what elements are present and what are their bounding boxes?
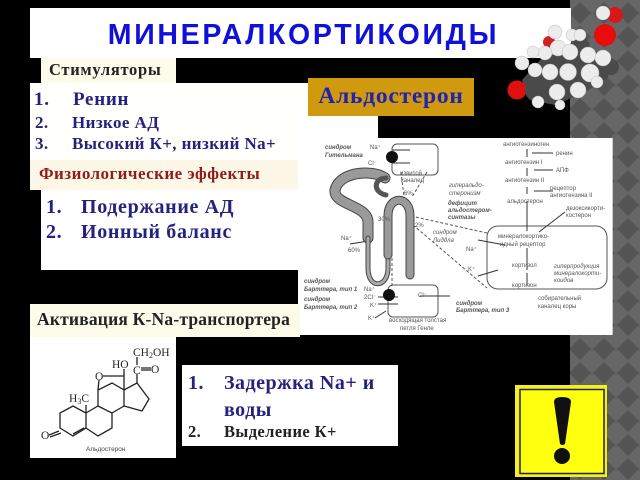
diagram: nephron and aldosterone regulation: АПФ [556,168,569,174]
result 1: 1. [188,372,204,394]
diagram: nephron and aldosterone regulation: собирательный [538,295,581,302]
diagram: nephron and aldosterone regulation: Na⁺ [466,246,477,253]
nephron tubule [335,173,410,284]
diagram: nephron and aldosterone regulation: Na⁺ [341,235,352,242]
item 3: 3. [35,134,49,153]
diagram: nephron and aldosterone regulation: каналец коры [538,304,576,310]
diagram: nephron and aldosterone regulation: синдром [325,145,352,151]
diagram: nephron and aldosterone regulation: коидов [554,278,573,284]
diagram: nephron and aldosterone regulation: Cl⁻ [368,161,377,167]
chart: aldosterone structural formula: 2 [149,351,153,360]
diagram: nephron and aldosterone regulation: извитой [400,170,422,177]
panel: stimulators list [30,83,310,161]
diagram: nephron and aldosterone regulation: синдром [304,297,331,303]
chart: aldosterone structural formula: H [69,393,77,405]
title [30,8,571,58]
heading: aldosterone [308,78,474,116]
panel: K-Na transporter activation heading: Активация К-Na-транспортера [37,309,290,329]
panel: effects of transporter activation [182,365,398,446]
diagram: nephron and aldosterone regulation: Na⁺ [370,144,381,151]
panel: effects list [41,190,299,270]
diagram: nephron and aldosterone regulation: Cl⁻ [418,293,427,299]
panel: physiological effects heading [30,160,300,190]
result 2: Выделение К+ [224,422,337,441]
chart: aldosterone structural formula: 3 [77,397,81,406]
diagram: nephron and aldosterone regulation: K⁺ [370,302,377,309]
effect 2: Ионный баланс [81,221,232,243]
diagram: nephron and aldosterone regulation: альдостерон [507,199,543,205]
panel: stimulators heading: Стимуляторы [49,60,161,79]
effect 2: 2. [46,221,62,243]
diagram: nephron and aldosterone regulation: 2Cl⁻ [364,295,376,301]
panel: K-Na transporter activation heading [30,304,300,337]
diagram: nephron and aldosterone regulation: синтазы [448,215,476,221]
diagram: nephron and aldosterone regulation: кортизол [512,263,537,269]
diagram: nephron and aldosterone regulation: 6% [404,191,413,197]
diagram: nephron and aldosterone regulation: дефицит [448,200,478,207]
chart: aldosterone structural formula: OH [153,347,170,359]
diagram: nephron and aldosterone regulation: Барттера, тип 3 [456,308,510,314]
item 1: 1. [34,89,50,110]
diagram: nephron and aldosterone regulation: дезоксикорти- [566,206,605,212]
item 1: Ренин [73,89,129,110]
diagram: nephron and aldosterone regulation: гиперальдо- [449,183,484,189]
chart: aldosterone structural formula: C [81,393,89,405]
item 2: Низкое АД [72,113,159,132]
chart: aldosterone structural formula: O [151,364,159,376]
chart: aldosterone structural formula: O [95,371,103,383]
effect 1: 1. [46,196,62,218]
effect 1: Подержание АД [81,196,234,218]
result 1: воды [224,399,272,421]
diagram: nephron and aldosterone regulation: синдром [304,279,331,285]
diagram: nephron and aldosterone regulation: ренин [556,151,573,157]
chart: aldosterone structural formula: C [133,365,141,377]
title: МИНЕРАЛКОРТИКОИДЫ [108,19,499,51]
diagram: nephron and aldosterone regulation: синдром [456,301,483,307]
diagram: nephron and aldosterone regulation: Лиддла [432,238,454,244]
diagram: nephron and aldosterone regulation: гиперпродукция [554,264,600,270]
result 2: 2. [188,422,201,441]
diagram: nephron and aldosterone regulation: минералокортико- [498,234,549,240]
diagram: nephron and aldosterone regulation: ангиотензин II [505,178,544,184]
chart: aldosterone structural formula: O [41,430,49,442]
heading: aldosterone: Альдостерон [318,83,464,109]
panel: stimulators heading [41,58,176,84]
diagram: nephron and aldosterone regulation: Гительмана [325,153,363,159]
diagram: nephron and aldosterone regulation: альдостером- [448,208,492,214]
diagram: nephron and aldosterone regulation: идный рецептор [500,241,546,248]
diagram: nephron and aldosterone regulation: костерон [566,213,591,219]
diagram: nephron and aldosterone regulation: Na⁺ [364,286,375,293]
diagram: nephron and aldosterone regulation: кортизон [512,283,537,289]
diagram: nephron and aldosterone regulation: петля Генле [400,326,434,332]
chart: aldosterone structural formula: CH [133,347,149,359]
diagram: nephron and aldosterone regulation: ангиотензина II [550,193,593,199]
diagram: nephron and aldosterone regulation: Барттера, тип 2 [304,305,358,311]
diagram: nephron and aldosterone regulation: минералокорти- [554,271,601,277]
item 3: Высокий К+, низкий Na+ [72,134,276,153]
diagram: nephron and aldosterone regulation: K⁺ [468,266,475,273]
result 1 [188,372,375,421]
diagram: nephron and aldosterone regulation: Барттера, тип 1 [304,287,358,293]
diagram: nephron and aldosterone regulation: синдром [433,230,457,236]
diagram: nephron and aldosterone regulation: 2% [415,223,424,229]
diagram: nephron and aldosterone regulation: рецептор [550,186,577,192]
diagram: nephron and aldosterone regulation: K⁺ [368,315,375,322]
diagram: nephron and aldosterone regulation: 30% [378,217,391,223]
item 2: 2. [35,113,49,132]
item 1 [34,89,129,110]
chart: aldosterone structural formula: HO [112,359,129,371]
diagram: nephron and aldosterone regulation: каналец [401,178,425,184]
diagram: nephron and aldosterone regulation: стеронизм [449,191,480,197]
diagram: nephron and aldosterone regulation: ангиотензин I [505,160,543,166]
chart: aldosterone structural formula: Альдостерон [86,446,126,453]
diagram: nephron and aldosterone regulation: восходящая толстая [389,318,446,324]
diagram: nephron and aldosterone regulation: ангиотензиноген [503,142,549,148]
diagram: nephron and aldosterone regulation: 60% [348,248,361,254]
result 1: Задержка Na+ и [224,372,375,394]
panel: physiological effects heading: Физиологические эффекты [39,164,260,183]
